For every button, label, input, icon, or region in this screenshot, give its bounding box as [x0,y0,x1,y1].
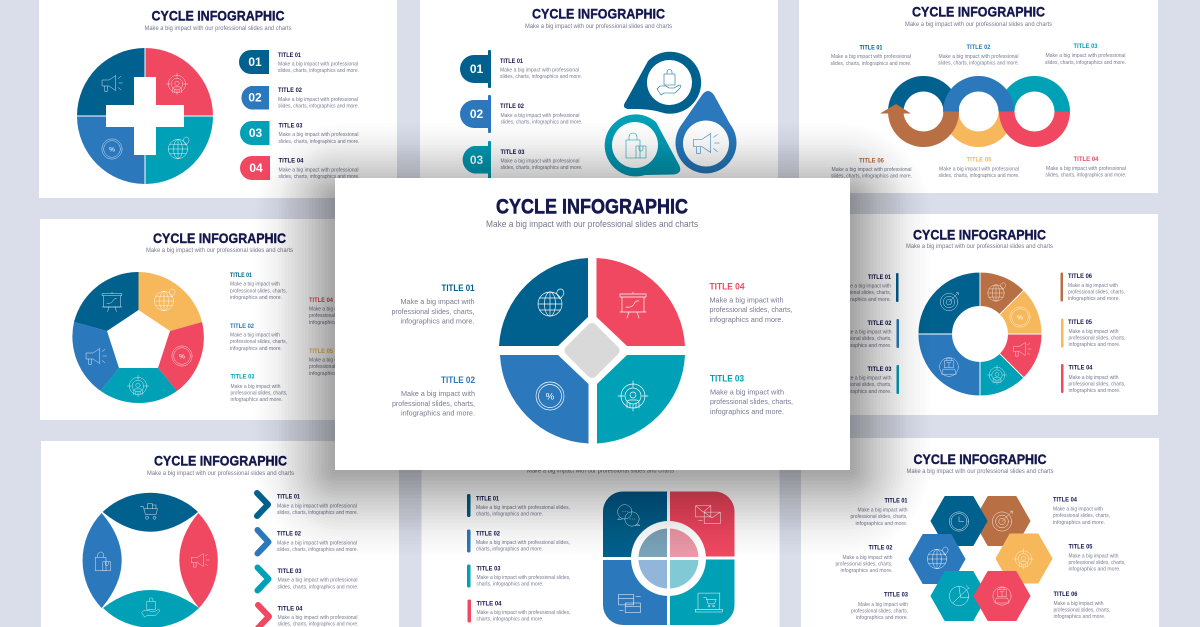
main heading: CYCLE INFOGRAPHIC [496,196,688,218]
left labels: infographics and more. [856,615,908,621]
slide card [799,0,1158,193]
left list: infographics and more. [840,389,892,395]
numbered list: TITLE 04 [278,158,304,164]
chevron list: slides, charts, infographics and more. [278,584,358,590]
numbered list: slides, charts, infographics and more. [278,174,360,180]
right list: infographics and more. [1068,342,1120,348]
subheading: Make a big impact with our professional slides and charts [527,468,674,474]
text: title 01 [392,283,475,326]
text: title 04: Make a big impact with [710,296,784,304]
left list: TITLE 03 [868,366,892,373]
slide card [801,438,1159,627]
left list: professional slides, charts, [834,382,892,388]
arrow head [880,104,911,114]
subheading: Make a big impact with our professional slides and charts [147,470,294,477]
heading: CYCLE INFOGRAPHIC [913,226,1046,242]
panel: four lens slide [41,441,399,627]
bottom labels: TITLE 05 [966,156,992,164]
text: title 03: professional slides, charts, [710,397,793,406]
numbered list: 02 [470,107,483,121]
text column 2: TITLE 05 [309,348,334,355]
left labels: Make a big impact with [842,555,893,561]
heading: CYCLE INFOGRAPHIC [152,8,284,24]
right list: TITLE 05 [1068,319,1093,326]
segment: blue [500,355,588,444]
left list: Make a big impact with [841,284,891,290]
numbered list: 03 [249,126,262,140]
text column 2: professional slides, charts, [309,364,366,370]
numbered list: 02 [248,90,262,104]
left list: infographics and more. [839,297,891,303]
text: title 02: TITLE 02 [441,375,475,386]
right list: Make a big impact with [1068,329,1119,335]
right labels [1053,496,1126,620]
text: title 03 [710,374,793,416]
numbered list: TITLE 01 [500,58,523,65]
quadrant square chart [603,492,734,625]
main subheading: Make a big impact with our professional slides and charts [486,219,698,229]
text: title 03: TITLE 03 [710,374,744,384]
panel: main cycle infographic [335,178,850,470]
bar list: TITLE 01 [476,496,499,502]
right list: infographics and more. [1068,388,1120,394]
text column 1: TITLE 01 [230,272,252,279]
chevron list: slides, charts, infographics and more. [277,510,358,516]
numbered list: slides, charts, infographics and more. [500,165,582,171]
numbered list: TITLE 03 [278,122,303,130]
subheading: Make a big impact with our professional slides and charts [906,468,1054,475]
donut icons [940,283,1031,385]
bar list: Make a big impact with professional slides, [476,610,570,616]
panel: hexagon slide [801,438,1159,627]
bottom labels: Make a big impact with professional [939,166,1019,172]
chevron list: TITLE 02 [277,530,302,538]
bar list: TITLE 03 [476,566,501,572]
bar list: Make a big impact with professional slides, [476,540,570,546]
right labels: infographics and more. [1054,614,1106,620]
center card drop shadow [255,123,930,555]
left labels: TITLE 01 [884,498,908,504]
numbered list: TITLE 02 [500,103,525,110]
text column 1 [230,272,288,403]
text: title 02: Make a big impact with [401,389,475,398]
right list: professional slides, charts, [1068,382,1126,388]
bottom labels: TITLE 06 [859,158,885,164]
left list: TITLE 01 [868,274,891,281]
bottom labels: Make a big impact with professional [832,167,912,173]
right labels: Make a big impact with [1054,601,1104,607]
left labels: TITLE 02 [868,544,893,552]
subheading: Make a big impact with our professional slides and charts [906,243,1053,250]
subheading: Make a big impact with our professional slides and charts [144,25,292,32]
numbered list: Make a big impact with professional [278,62,358,68]
heading: CYCLE INFOGRAPHIC [912,4,1045,20]
subheading: Make a big impact with our professional slides and charts [905,21,1052,28]
numbered list: Make a big impact with professional [278,97,358,103]
right list: TITLE 04 [1068,364,1093,372]
bar list: charts, infographics and more. [476,582,544,588]
icon: percent: % [546,392,555,402]
bar list: Make a big impact with professional slides, [476,505,570,511]
top labels: TITLE 01 [860,44,883,52]
main card [335,178,850,470]
right labels: Make a big impact with [1053,506,1103,512]
text: title 03: Make a big impact with [710,388,784,396]
numbered list: slides, charts, infographics and more. [278,104,359,110]
right list: infographics and more. [1068,296,1120,302]
center diamond [562,321,622,380]
bar list [467,494,570,622]
chevron list: Make a big impact with professional [278,578,358,584]
text column 2: professional slides, charts, [309,313,366,319]
bottom labels [831,156,1126,180]
bar list: charts, infographics and more. [476,616,544,622]
numbered list: slides, charts, infographics and more. [500,120,582,126]
text: title 01: TITLE 01 [442,283,475,294]
linked rings chart [880,76,1070,147]
left list: professional slides, charts, [834,290,891,296]
text column 1: professional slides, charts, [230,339,287,345]
top labels: TITLE 03 [1074,43,1098,50]
left labels: professional slides, charts, [850,514,908,520]
numbered list: slides, charts, infographics and more. [278,68,359,74]
right labels: TITLE 04 [1053,496,1078,504]
heading: CYCLE INFOGRAPHIC [532,6,665,22]
slide card [39,0,397,198]
chevron list: TITLE 01 [277,494,300,500]
text column 1: infographics and more. [230,295,282,301]
top labels [830,43,1126,67]
left labels: infographics and more. [840,568,892,574]
right labels: Make a big impact with [1068,554,1119,560]
text: title 02: infographics and more. [401,408,475,418]
donut icons: % [1017,314,1023,322]
numbered list: Make a big impact with professional [500,68,579,74]
chevron list: Make a big impact with professional [278,615,358,621]
segment: red [596,258,685,346]
top labels: Make a big impact with professional [831,54,911,60]
numbered list [239,50,360,180]
bottom labels: slides, charts, infographics and more. [831,174,912,180]
text: title 01: professional slides, charts, [392,307,474,316]
numbered list: 04 [249,161,263,175]
text: title 04: infographics and more. [710,315,784,324]
panel: pentagon pie slide [40,219,366,420]
heading: CYCLE INFOGRAPHIC [154,453,287,469]
numbered list: slides, charts, infographics and more. [278,139,360,145]
heading: CYCLE INFOGRAPHIC [914,451,1046,467]
text column 2: infographics and more. [309,320,361,326]
right labels: professional slides, charts, [1068,560,1126,566]
bottom labels: slides, charts, infographics and more. [938,173,1020,179]
text column 1: Make a big impact with [230,384,281,390]
top labels: Make a big impact with professional [938,54,1018,60]
heading: CYCLE INFOGRAPHIC [153,230,286,246]
text: title 02: professional slides, charts, [392,399,475,408]
bar list: TITLE 02 [476,530,501,538]
right list: Make a big impact with [1068,375,1119,381]
subheading: Make a big impact with our professional slides and charts [525,23,672,30]
text: title 03: infographics and more. [710,407,784,416]
panel: cross pie slide [39,0,397,198]
left list: Make a big impact with [842,330,892,336]
left labels [836,498,909,621]
numbered list: Make a big impact with professional [500,113,580,119]
text column 1: infographics and more. [230,397,282,403]
slide card [40,219,350,420]
text column 1: TITLE 03 [230,374,255,380]
text column 1: infographics and more. [230,346,282,352]
main four-part pie chart [499,258,685,444]
right list: professional slides, charts, [1068,290,1125,296]
left labels: professional slides, charts, [836,562,892,568]
text column 2: Make a big impact with [309,306,359,312]
text column 2: Make a big impact with [309,358,359,364]
bar list: charts, infographics and more. [476,546,543,552]
chevron list: TITLE 04 [278,606,303,612]
numbered list: Make a big impact with professional [278,168,358,174]
right list: professional slides, charts, [1068,336,1126,342]
text column 2: infographics and more. [309,371,361,377]
chevron list [257,493,358,627]
right list: Make a big impact with [1068,283,1118,289]
numbered list: Make a big impact with professional [500,158,580,164]
chevron list: Make a big impact with professional [277,540,357,546]
numbered list: TITLE 01 [278,52,301,59]
numbered list [460,50,582,179]
text: title 02 [392,375,475,418]
right labels: TITLE 06 [1054,591,1078,598]
panel: linked rings slide [799,0,1158,193]
cross pie chart [77,48,213,184]
bar list: charts, infographics and more. [476,512,543,518]
bottom labels: TITLE 04 [1074,156,1099,163]
icon: percent [536,382,564,410]
numbered list: 01 [248,55,262,69]
top labels: slides, charts, infographics and more. [1045,60,1126,66]
slide card [800,214,1158,415]
text: title 04: TITLE 04 [710,282,745,292]
left labels: Make a big impact with [858,508,908,514]
numbered list: TITLE 02 [278,87,303,94]
left list: Make a big impact with [842,376,892,382]
slide card [420,0,778,200]
slide card [422,450,780,627]
teardrop: blue [676,91,736,173]
teardrop: dark blue [624,52,701,114]
chevron list: TITLE 03 [278,568,302,575]
subheading: Make a big impact with our professional slides and charts [146,247,293,254]
text: title 04 [710,282,792,324]
left list [834,273,899,395]
icon: presentation [620,292,646,318]
pentagon pie chart: % [179,354,185,360]
bar list: Make a big impact with professional slides, [476,575,570,581]
panel: donut slide [800,214,1158,415]
cross pie chart: % [109,146,115,154]
top labels: TITLE 02 [966,44,991,51]
segment: teal [597,355,685,444]
text column 1: Make a big impact with [230,332,280,338]
bar list: TITLE 04 [476,600,502,608]
numbered list: Make a big impact with professional [278,132,358,138]
text column 2 [309,297,366,377]
text column 1: TITLE 02 [230,323,255,330]
chevron list: Make a big impact with professional [277,504,357,510]
left list: TITLE 02 [868,320,892,327]
text column 1: professional slides, charts, [230,288,287,294]
bottom labels: slides, charts, infographics and more. [1046,172,1126,178]
slide card [41,441,399,627]
left list: professional slides, charts, [834,336,892,342]
left labels: infographics and more. [856,521,908,527]
segment: dark blue [499,258,588,346]
right labels: TITLE 05 [1068,544,1093,550]
left labels: Make a big impact with [858,602,908,608]
right list: TITLE 06 [1068,273,1093,280]
text: title 04: professional slides, charts, [710,305,792,314]
teardrop: teal [605,114,680,176]
right labels: infographics and more. [1053,520,1105,526]
numbered list: TITLE 03 [500,149,525,156]
right list [1060,272,1126,394]
right labels: professional slides, charts, [1054,608,1110,614]
top labels: slides, charts, infographics and more. [938,60,1019,66]
donut chart [918,272,1042,396]
right labels: professional slides, charts, [1053,513,1110,519]
text: title 01: infographics and more. [400,316,474,326]
panel: rounded square slide [422,450,780,627]
numbered list: 01 [470,62,483,76]
lens cycle chart [83,493,218,627]
top labels: Make a big impact with professional [1046,53,1126,59]
text column 1: professional slides, charts, [230,390,288,396]
chevron list: slides, charts, infographics and more. [277,547,358,553]
left labels: professional slides, charts, [851,608,908,614]
icon: target person [618,381,648,411]
numbered list: slides, charts, infographics and more. [500,74,582,80]
left list: infographics and more. [840,343,892,349]
left labels: TITLE 03 [884,592,909,598]
top labels: slides, charts, infographics and more. [830,61,912,67]
panel: teardrop slide [420,0,778,200]
text column 2: TITLE 04 [309,297,334,304]
text column 1: Make a big impact with [230,282,280,288]
hexagon chart [909,496,1052,620]
text: title 01: Make a big impact with [400,297,474,306]
right labels: infographics and more. [1068,566,1120,572]
pentagon pie chart [72,272,204,403]
icon: globe [538,289,564,316]
numbered list: 03 [470,153,483,167]
bottom labels: Make a big impact with professional [1046,166,1126,172]
